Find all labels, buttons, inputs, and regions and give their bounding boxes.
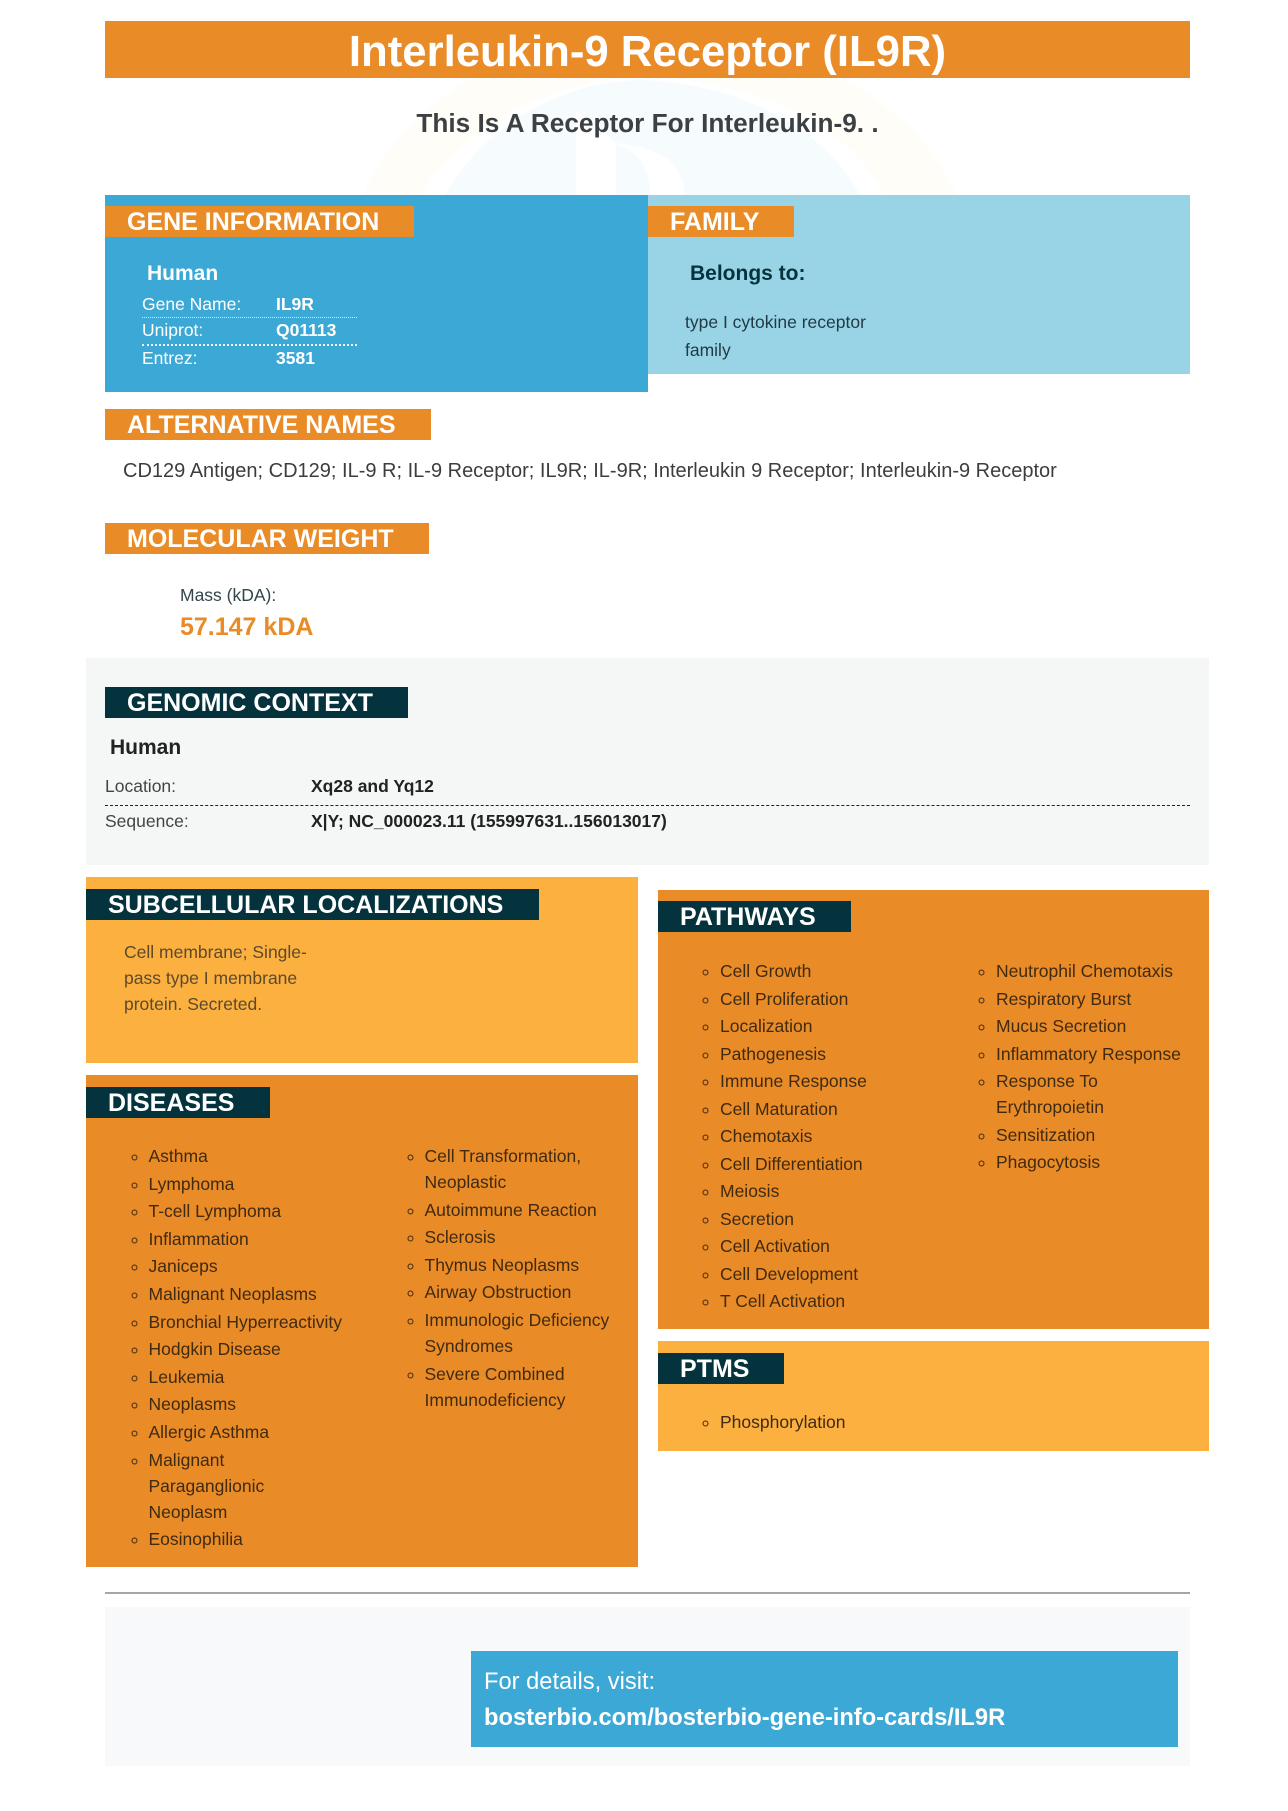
- disease list column 1: Allergic Asthma: [148, 1422, 269, 1442]
- disease list column 1: Lymphoma: [148, 1174, 234, 1194]
- heading: genomic context: GENOMIC CONTEXT: [127, 689, 373, 717]
- pathway list column 2: [978, 961, 1181, 1172]
- panel: pathways: [658, 890, 1209, 1329]
- heading: molecular weight: MOLECULAR WEIGHT: [127, 525, 394, 553]
- sequence row: Sequence:: [105, 811, 189, 831]
- watermark logo: [446, 80, 860, 195]
- alternative names text: CD129 Antigen; CD129; IL-9 R; IL-9 Receptor; IL9R; IL-9R; Interleukin 9 Receptor; Interleukin-9 Receptor: [123, 460, 1057, 482]
- sequence row: [105, 811, 667, 831]
- title: [105, 21, 1190, 78]
- heading: gene information: GENE INFORMATION: [127, 208, 379, 236]
- heading: subcellular localizations: SUBCELLULAR LOCALIZATIONS: [108, 891, 503, 919]
- gene name row: IL9R: [276, 294, 314, 314]
- pathway list column 1: Localization: [720, 1016, 812, 1036]
- species label: Human: [110, 736, 181, 759]
- disease list column 2: Severe Combined: [424, 1364, 565, 1384]
- disease list column 1: Asthma: [148, 1146, 208, 1166]
- gene name row: Gene Name:: [142, 294, 241, 314]
- footer rule: [105, 1592, 1190, 1594]
- localization text: protein. Secreted.: [124, 994, 262, 1014]
- mass label: Mass (kDA):: [180, 585, 276, 605]
- localization text: [124, 942, 307, 1014]
- pathway list column 1: Cell Maturation: [720, 1098, 838, 1118]
- disease list column 1: Paraganglionic: [148, 1476, 264, 1496]
- pathway list column 2: Inflammatory Response: [996, 1044, 1181, 1064]
- callout text: For details, visit:: [484, 1669, 655, 1695]
- disease list column 2: Sclerosis: [424, 1227, 496, 1247]
- disease list column 2: Neoplastic: [424, 1172, 506, 1192]
- pathway list column 1: Meiosis: [720, 1181, 779, 1201]
- disease list column 2: Thymus Neoplasms: [424, 1255, 579, 1275]
- heading: alternative names: ALTERNATIVE NAMES: [127, 411, 396, 439]
- disease list column 2: Cell Transformation,: [424, 1146, 581, 1166]
- disease list column 1: Neoplasm: [148, 1502, 227, 1522]
- heading: diseases: DISEASES: [108, 1089, 234, 1117]
- pathway list column 1: Cell Proliferation: [720, 988, 848, 1008]
- disease list column 2: Autoimmune Reaction: [424, 1200, 597, 1220]
- panel: footer: [105, 1607, 1190, 1766]
- heading: pathways: [658, 901, 851, 932]
- panel: diseases: [86, 1075, 638, 1567]
- disease list column 1: Hodgkin Disease: [148, 1339, 281, 1359]
- disease list column 1: Janiceps: [148, 1256, 218, 1276]
- uniprot row: [142, 317, 357, 346]
- sequence row: X|Y; NC_000023.11 (155997631..156013017): [311, 811, 667, 831]
- disease list column 1: T-cell Lymphoma: [148, 1201, 281, 1221]
- uniprot row: Q01113: [276, 320, 336, 340]
- pathway list column 1: Secretion: [720, 1208, 794, 1228]
- panel: genomic context: [86, 658, 1209, 865]
- disease list column 1: Inflammation: [148, 1229, 249, 1249]
- disease list column 1: Eosinophilia: [148, 1529, 243, 1549]
- panel: subcellular localizations: [86, 877, 638, 1063]
- pathway list column 1: Cell Development: [720, 1264, 858, 1284]
- heading: pathways: PATHWAYS: [680, 903, 816, 931]
- subtitle: This Is A Receptor For Interleukin-9. .: [416, 108, 879, 138]
- disease list column 2: Immunodeficiency: [424, 1390, 566, 1410]
- family text: [685, 312, 866, 360]
- heading: family: FAMILY: [670, 208, 759, 236]
- disease list column 2: [408, 1146, 610, 1410]
- family text: family: [685, 340, 731, 360]
- pathway list column 1: Chemotaxis: [720, 1126, 812, 1146]
- entrez row: Entrez:: [142, 348, 197, 368]
- localization text: pass type I membrane: [124, 968, 297, 988]
- panel: family: [648, 195, 1190, 374]
- disease list column 1: Leukemia: [148, 1367, 224, 1387]
- pathway list column 2: Erythropoietin: [996, 1097, 1104, 1117]
- callout url: bosterbio.com/bosterbio-gene-info-cards/IL9R: [484, 1705, 1005, 1731]
- title: Interleukin-9 Receptor (IL9R): [349, 27, 946, 76]
- pathway list column 1: Pathogenesis: [720, 1044, 826, 1064]
- panel: ptms: [658, 1341, 1209, 1451]
- pathway list column 2: Respiratory Burst: [996, 988, 1131, 1008]
- disease list column 1: Malignant Neoplasms: [148, 1284, 317, 1304]
- location row: Xq28 and Yq12: [311, 776, 434, 796]
- ptm list: Phosphorylation: [720, 1412, 846, 1432]
- heading: diseases: [86, 1087, 270, 1118]
- entrez row: [142, 348, 315, 368]
- uniprot row: Uniprot:: [142, 320, 203, 340]
- pathway list column 2: Sensitization: [996, 1124, 1095, 1144]
- heading: ptms: PTMS: [680, 1355, 749, 1383]
- localization text: Cell membrane; Single-: [124, 942, 307, 962]
- disease list column 1: Bronchial Hyperreactivity: [148, 1312, 342, 1332]
- pathway list column 2: Phagocytosis: [996, 1152, 1100, 1172]
- belongs to label: Belongs to:: [690, 262, 806, 285]
- disease list column 2: Immunologic Deficiency: [424, 1310, 609, 1330]
- heading: ptms: [658, 1353, 784, 1384]
- pathway list column 1: Cell Activation: [720, 1236, 830, 1256]
- mass value: 57.147 kDA: [180, 613, 313, 641]
- pathway list column 1: [702, 961, 867, 1311]
- panel: gene information: [105, 195, 648, 392]
- pathway list column 2: Neutrophil Chemotaxis: [996, 961, 1173, 981]
- disease list column 1: [132, 1146, 342, 1549]
- pathway list column 1: Cell Differentiation: [720, 1154, 863, 1174]
- heading: family: [648, 206, 794, 237]
- callout: details link: [471, 1651, 1178, 1747]
- disease list column 2: Syndromes: [424, 1336, 513, 1356]
- entrez row: 3581: [276, 348, 315, 368]
- pathway list column 2: Mucus Secretion: [996, 1016, 1126, 1036]
- disease list column 1: Malignant: [148, 1450, 224, 1470]
- disease list column 1: Neoplasms: [148, 1394, 236, 1414]
- pathway list column 1: Immune Response: [720, 1071, 867, 1091]
- species label: Human: [147, 262, 218, 285]
- disease list column 2: Airway Obstruction: [424, 1282, 571, 1302]
- pathway list column 2: Response To: [996, 1071, 1098, 1091]
- location row: Location:: [105, 776, 176, 796]
- pathway list column 1: Cell Growth: [720, 961, 811, 981]
- pathway list column 1: T Cell Activation: [720, 1291, 845, 1311]
- family text: type I cytokine receptor: [685, 312, 866, 332]
- gene name row: [142, 291, 357, 318]
- location row: [105, 773, 1190, 806]
